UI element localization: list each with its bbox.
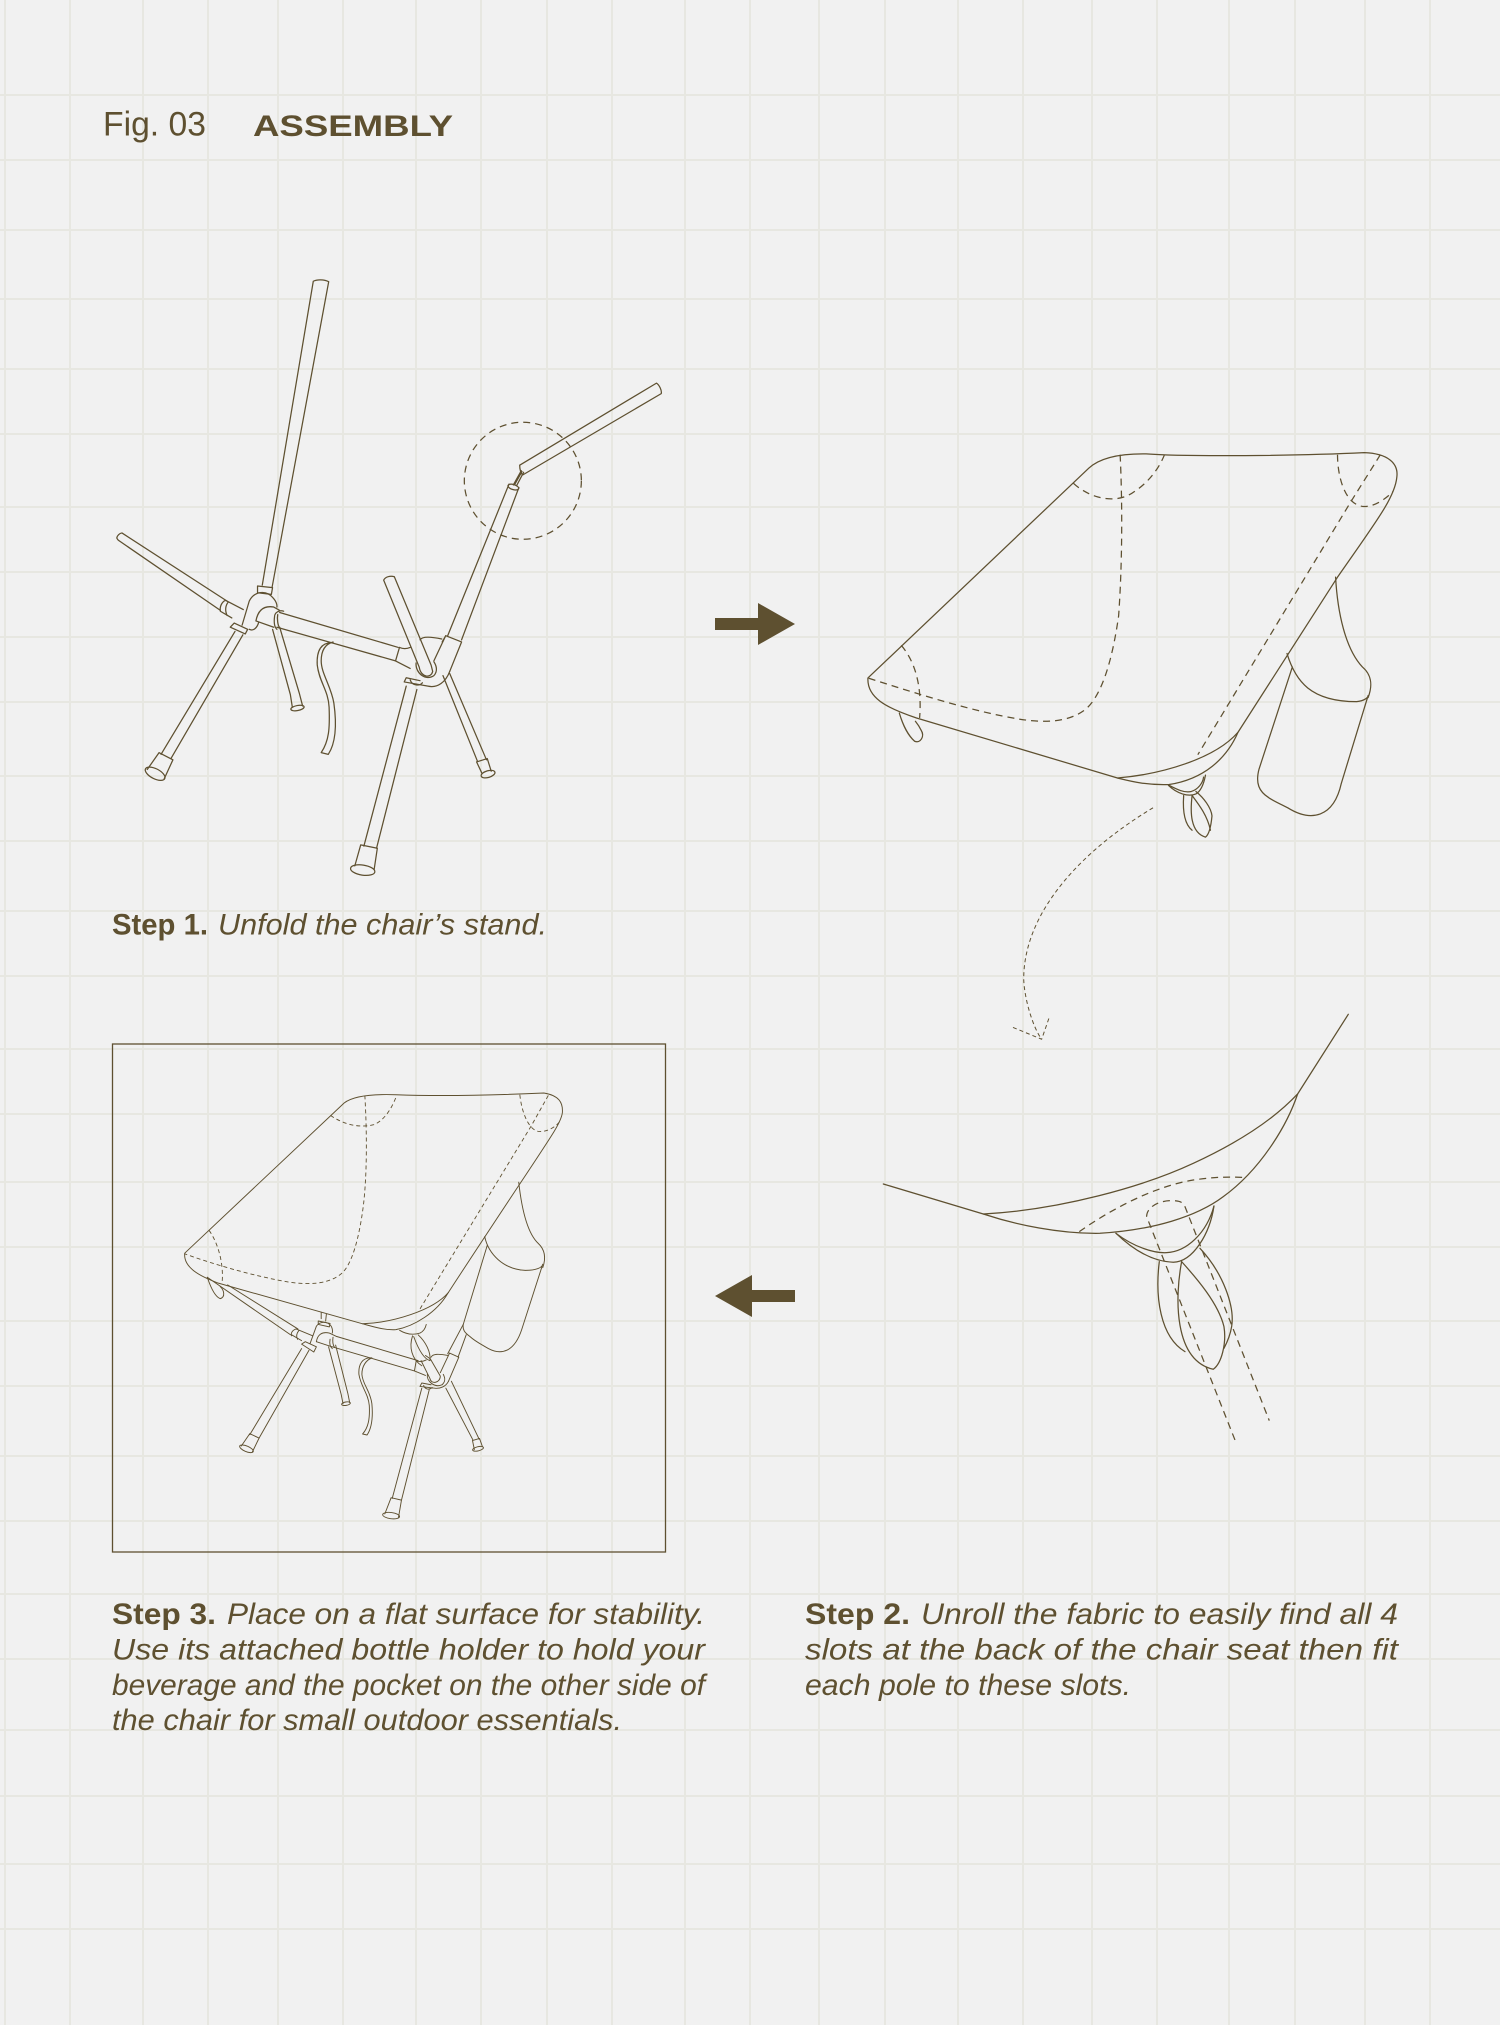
caption: step 1: Unfold the chair’s stand. (218, 908, 547, 942)
caption: step 3: Place on a flat surface for stability. (227, 1598, 705, 1631)
illustration: assembled chair (185, 1093, 562, 1520)
arrow: left (715, 1275, 795, 1317)
caption: step 2: Step 2. (805, 1598, 910, 1631)
illustration: step 2 slot detail (883, 1014, 1348, 1440)
caption: step 2 (805, 1598, 1400, 1702)
title (103, 106, 453, 144)
caption: step 3: the chair for small outdoor essentials. (112, 1704, 622, 1737)
caption: step 2: each pole to these slots. (805, 1669, 1131, 1702)
arrow: dashed curve from seat corner to detail (1013, 808, 1153, 1039)
arrow: right (715, 603, 795, 645)
caption: step 3: beverage and the pocket on the other side of (112, 1669, 708, 1702)
title: Fig. 03 (103, 106, 206, 144)
caption: step 3: Step 3. (112, 1598, 216, 1631)
caption: step 3: Use its attached bottle holder to hold your (112, 1634, 706, 1666)
caption: step 1: Step 1. (112, 908, 208, 942)
illustration: step 1 chair frame (117, 280, 661, 877)
caption: step 2: slots at the back of the chair seat then fit (805, 1634, 1400, 1666)
caption: step 3 (112, 1598, 708, 1737)
illustration: step 2 chair seat (868, 453, 1397, 837)
panel: step 3 framed assembled chair (112, 1044, 666, 1552)
title: ASSEMBLY (253, 110, 453, 143)
caption: step 2: Unroll the fabric to easily find all 4 (921, 1598, 1398, 1631)
